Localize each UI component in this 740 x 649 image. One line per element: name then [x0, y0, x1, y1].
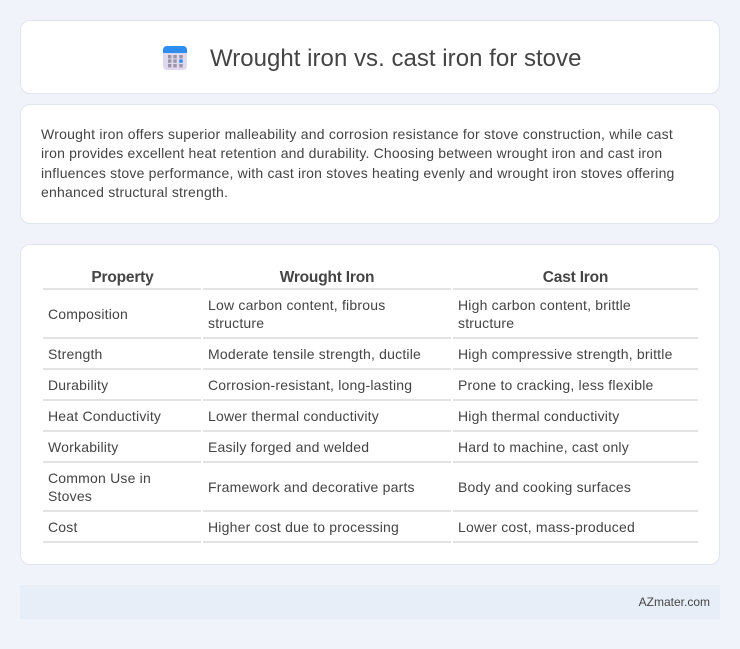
table: wrought iron vs cast iron: Strength	[48, 346, 103, 362]
table: wrought iron vs cast iron: Easily forged and welded	[208, 439, 369, 455]
table: wrought iron vs cast iron: High thermal conductivity	[458, 408, 619, 424]
table: wrought iron vs cast iron: Hard to machine, cast only	[458, 439, 629, 455]
footer credit: AZmater.com	[639, 595, 710, 609]
summary text	[41, 126, 675, 200]
table: wrought iron vs cast iron: Prone to cracking, less flexible	[458, 377, 654, 393]
table: wrought iron vs cast iron: Durability	[48, 377, 108, 393]
table: wrought iron vs cast iron: Body and cooking surfaces	[458, 479, 631, 495]
table: wrought iron vs cast iron: Lower thermal conductivity	[208, 408, 379, 424]
table: wrought iron vs cast iron: Heat Conductivity	[48, 408, 161, 424]
panel: comparison table	[20, 244, 720, 565]
table: wrought iron vs cast iron: Cost	[48, 519, 78, 535]
summary text: influences stove performance, with cast iron stoves heating evenly and wrought iron stoves offering	[41, 164, 675, 180]
title: Wrought iron vs. cast iron for stove	[210, 45, 581, 72]
panel: title card	[20, 20, 720, 94]
table: wrought iron vs cast iron: Framework and decorative parts	[208, 479, 415, 495]
table: wrought iron vs cast iron: High carbon content, brittle	[458, 297, 631, 313]
table: wrought iron vs cast iron: High compressive strength, brittle	[458, 346, 673, 362]
table: wrought iron vs cast iron: Common Use in	[48, 470, 151, 486]
table: wrought iron vs cast iron: Stoves	[48, 488, 92, 504]
table: wrought iron vs cast iron: Property	[91, 269, 154, 286]
panel: summary card	[20, 104, 720, 224]
summary text: enhanced structural strength.	[41, 184, 228, 200]
table: wrought iron vs cast iron: Low carbon content, fibrous	[208, 297, 385, 313]
summary text: iron provides excellent heat retention and durability. Choosing between wrought iron and cast iron	[41, 145, 662, 161]
table: wrought iron vs cast iron: Workability	[48, 439, 118, 455]
table: wrought iron vs cast iron: Higher cost due to processing	[208, 519, 399, 535]
table: wrought iron vs cast iron: Wrought Iron	[280, 269, 374, 286]
footer bar	[20, 585, 720, 619]
table: wrought iron vs cast iron: Corrosion-resistant, long-lasting	[208, 377, 412, 393]
table: wrought iron vs cast iron	[43, 269, 698, 543]
table: wrought iron vs cast iron: Moderate tensile strength, ductile	[208, 346, 421, 362]
summary text: Wrought iron offers superior malleability and corrosion resistance for stove construction, while cast	[41, 126, 673, 142]
table: wrought iron vs cast iron: structure	[458, 315, 514, 331]
table: wrought iron vs cast iron: Lower cost, mass-produced	[458, 519, 635, 535]
icon: calendar	[163, 46, 187, 70]
table: wrought iron vs cast iron: structure	[208, 315, 264, 331]
table: wrought iron vs cast iron: Composition	[48, 306, 128, 322]
table: wrought iron vs cast iron: Cast Iron	[543, 269, 608, 286]
